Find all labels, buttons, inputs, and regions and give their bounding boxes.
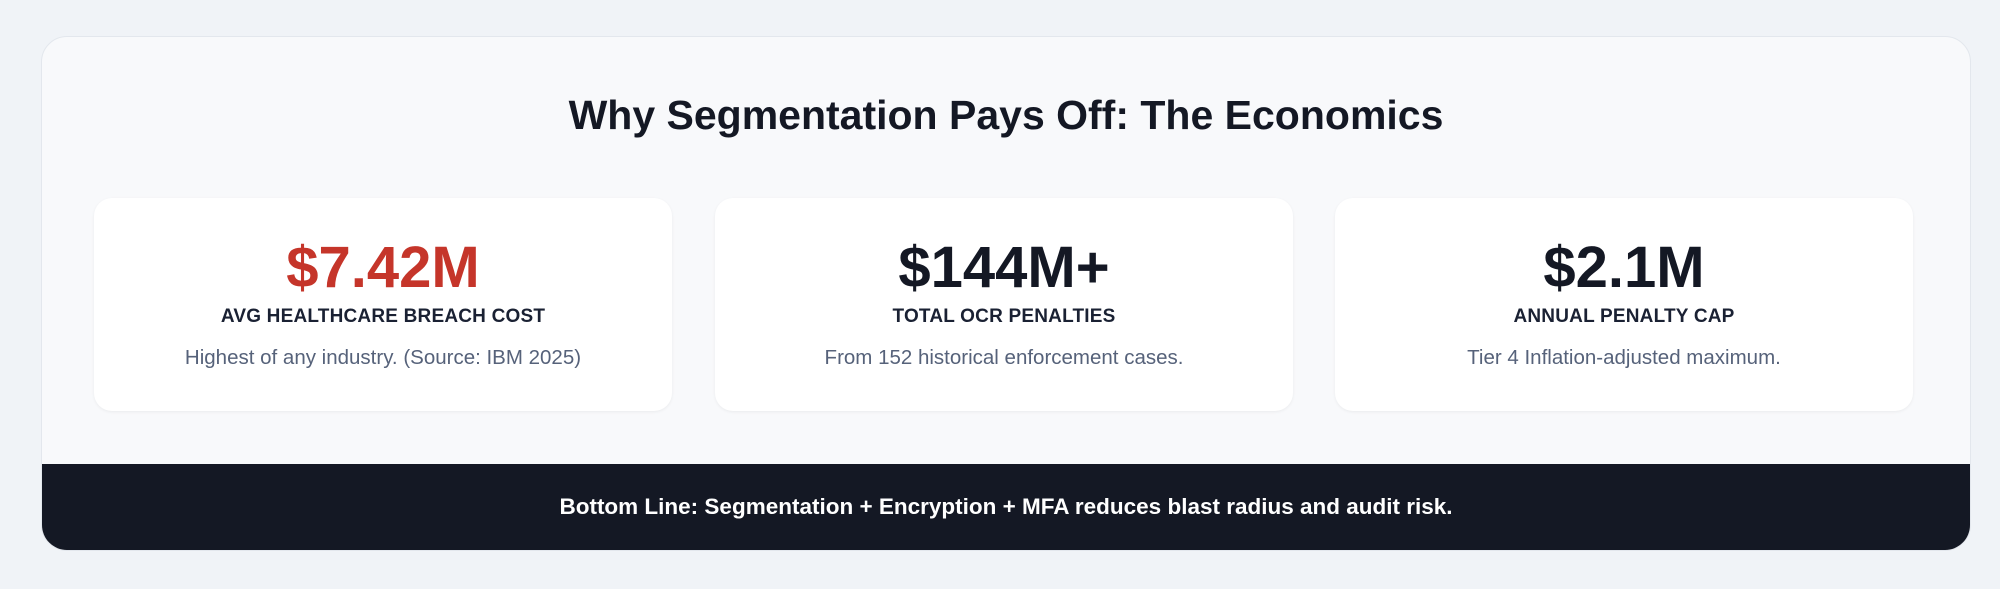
stat label: TOTAL OCR PENALTIES	[892, 306, 1116, 327]
stat number: $2.1M	[1543, 235, 1705, 300]
card: penalty cap	[1335, 198, 1913, 411]
stat label: ANNUAL PENALTY CAP	[1513, 306, 1735, 327]
stat description: From 152 historical enforcement cases.	[825, 346, 1183, 369]
stat number: $144M+	[898, 235, 1110, 300]
stat number: $7.42M	[286, 235, 480, 300]
footer bar: bottom line	[42, 464, 1970, 550]
stat description: Highest of any industry. (Source: IBM 2025)	[185, 346, 581, 369]
stat label: AVG HEALTHCARE BREACH COST	[221, 306, 545, 327]
stat description: Tier 4 Inflation-adjusted maximum.	[1467, 346, 1781, 369]
title: Why Segmentation Pays Off: The Economics	[569, 92, 1443, 138]
footer bar: bottom line: Bottom Line: Segmentation + Encryption + MFA reduces blast radius and audit risk.	[559, 494, 1453, 519]
card: OCR penalties	[715, 198, 1293, 411]
card: breach cost	[94, 198, 672, 411]
